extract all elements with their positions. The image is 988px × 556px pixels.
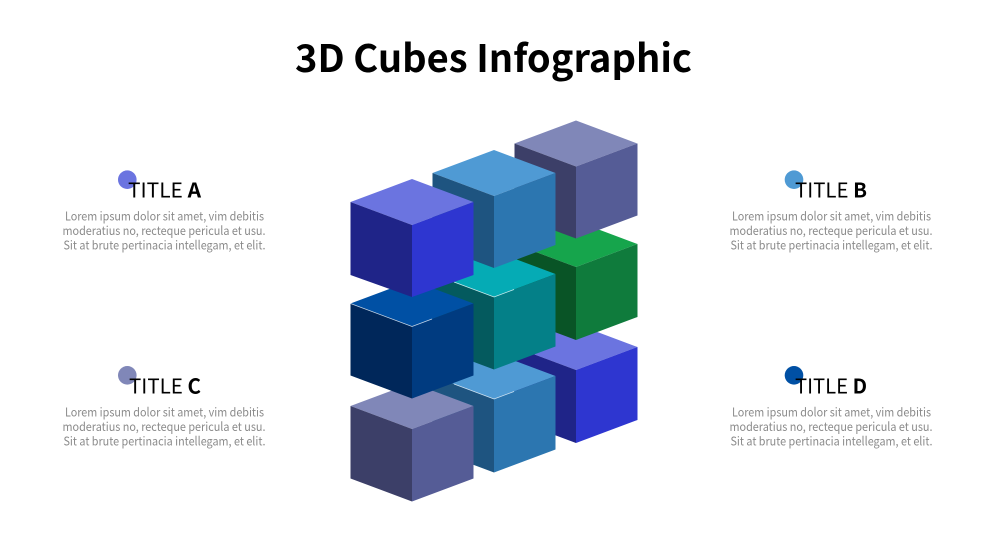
panel: title D [730, 366, 932, 450]
icon: dot D [785, 366, 803, 385]
text block: description A: moderatius no, recteque pericula et usu. [62, 222, 266, 239]
cube: middle centre teal [432, 251, 556, 370]
cube: lower centre blue [432, 353, 556, 472]
text block: description A: Sit at brute pertinacia intellegam, et elit. [64, 237, 266, 254]
cube: top centre blue [432, 150, 556, 268]
text block: description D: Sit at brute pertinacia intellegam, et elit. [730, 433, 932, 450]
cube: middle right green [514, 221, 638, 340]
text block: description D: Lorem ipsum dolor sit amet, vim debitis [732, 404, 931, 421]
icon: dot C [118, 366, 137, 385]
text block: description A: Lorem ipsum dolor sit amet, vim debitis [65, 208, 264, 225]
panel: title A [62, 170, 266, 254]
heading: title C: TITLE C [129, 370, 201, 400]
text block: description C: Sit at brute pertinacia intellegam, et elit. [64, 433, 266, 450]
heading: title A: TITLE A [128, 174, 202, 204]
cube: bottom left grey-blue [350, 383, 474, 502]
cube: top left purple [350, 179, 474, 297]
heading: title B: TITLE B [795, 174, 867, 204]
title: 3D Cubes Infographic [295, 28, 692, 83]
text block: description B [730, 208, 932, 254]
text block: description A [62, 208, 266, 254]
text block: description C: Lorem ipsum dolor sit amet, vim debitis [65, 404, 264, 421]
text block: description B: Lorem ipsum dolor sit amet, vim debitis [732, 208, 931, 225]
panel: title C [62, 366, 266, 450]
cube: lower right purple [514, 324, 638, 443]
text block: description D: moderatius no, recteque pericula et usu. [730, 418, 932, 435]
text block: description B: moderatius no, recteque pericula et usu. [730, 222, 932, 239]
icon: dot A [118, 170, 137, 189]
heading: title D: TITLE D [795, 370, 867, 400]
cube: top right grey-blue [514, 120, 638, 238]
text block: description C [62, 404, 266, 450]
icon: dot B [785, 170, 803, 189]
text block: description B: Sit at brute pertinacia intellegam, et elit. [730, 237, 932, 254]
cube stack illustration [350, 120, 638, 502]
cube: middle left navy [350, 280, 474, 398]
text block: description D [730, 404, 932, 450]
text block: description C: moderatius no, recteque pericula et usu. [62, 418, 266, 435]
panel: title B [730, 170, 932, 254]
